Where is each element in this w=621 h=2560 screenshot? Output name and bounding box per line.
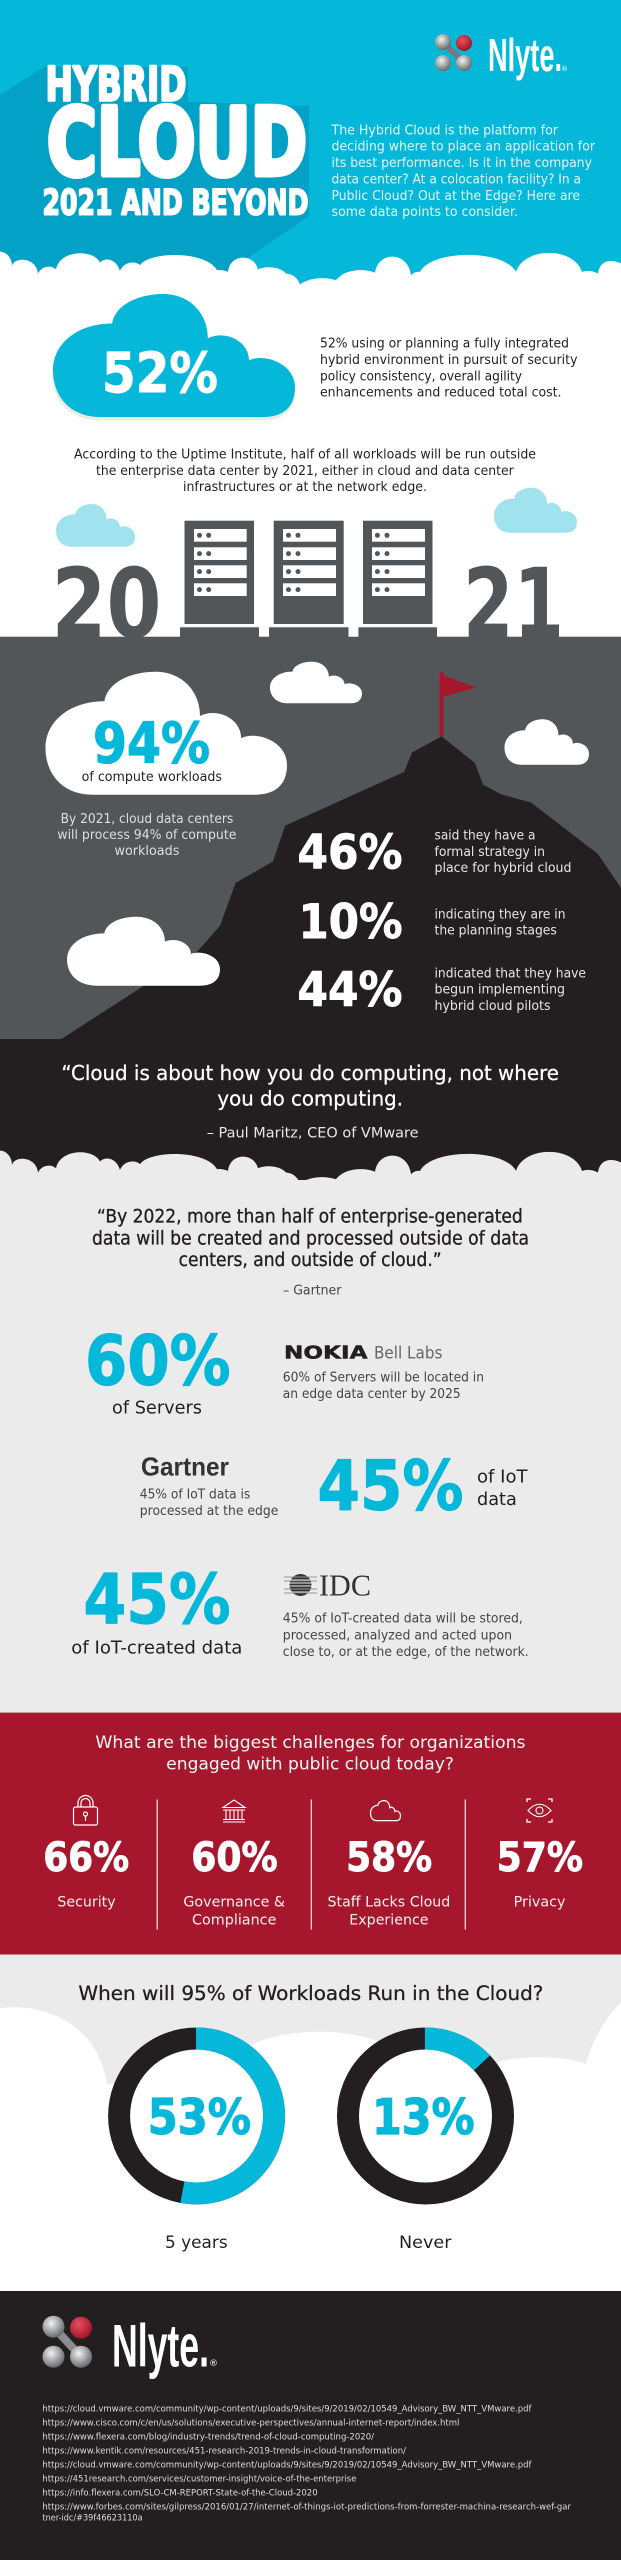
stat: 94%: 94% (93, 711, 210, 776)
cloud edge (0, 1151, 621, 1189)
intro text: some data points to consider. (332, 204, 518, 220)
icon: flag (440, 672, 476, 736)
year digits: 20: 20 (52, 548, 162, 660)
quote: Paul Maritz: “Cloud is about how you do computing, not where (61, 1061, 559, 1085)
logo: IDC: IDC (319, 1568, 371, 1603)
labels: challenge names: Staff Lacks Cloud (328, 1895, 450, 1911)
text: 52% description: policy consistency, overall agility (320, 368, 522, 384)
text: Gartner description: processed at the edge (140, 1503, 278, 1519)
panel: 94 percent (46, 672, 287, 859)
quote: Gartner: data will be created and processed outside of data (92, 1228, 529, 1249)
quote: Gartner: centers, and outside of cloud.” (179, 1250, 442, 1271)
stat: 45% of IoT-created data: 45% (84, 1560, 230, 1640)
text: Uptime Institute: the enterprise data center by 2021, either in cloud and data center (96, 463, 514, 479)
text: Nokia description: an edge data center by 2025 (283, 1386, 461, 1402)
text: 52% description (320, 336, 578, 401)
label: of compute workloads: of compute workloads (82, 769, 222, 785)
logo: Nokia Bell Labs: NOKIA (284, 1342, 368, 1363)
donut: 53% (119, 2038, 274, 2194)
cloud shadow (52, 297, 295, 420)
stat: 45% of IoT-created data: of IoT-created data (71, 1637, 242, 1658)
text: sources: https://info.flexera.com/SLO-CM-REPORT-State-of-the-Cloud-2020 (42, 2489, 318, 2499)
text: 46% description: place for hybrid cloud (434, 860, 572, 876)
text: Gartner description (140, 1486, 278, 1519)
labels: challenge names: Governance & (183, 1895, 285, 1911)
stat: 60% of Servers: of Servers (112, 1397, 202, 1418)
text: 52% description: 52% using or planning a fully integrated (320, 336, 569, 352)
icon: lock (74, 1796, 98, 1825)
stat: 60% of Servers: 60% (85, 1322, 231, 1402)
stat group: hybrid cloud strategy (298, 826, 586, 1018)
intro text: The Hybrid Cloud is the platform for (331, 122, 558, 138)
title long shadow (0, 67, 309, 285)
background cloud (0, 2002, 621, 2295)
text: 46% description: said they have a (434, 827, 536, 843)
text: IDC description: processed, analyzed and acted upon (283, 1627, 512, 1643)
label: 5 years: 5 years (165, 2233, 228, 2252)
text: 44% description (434, 966, 586, 1014)
labels: challenge names: Privacy (514, 1895, 566, 1911)
text: 10% description: the planning stages (434, 923, 557, 939)
text: sources: https://www.flexera.com/blog/industry-trends/trend-of-cloud-computing-2020/ (42, 2433, 374, 2443)
label: Never: Never (399, 2233, 452, 2252)
text: Uptime Institute (74, 446, 536, 495)
text: sources: https://www.kentik.com/resources/451-research-2019-trends-in-cloud-transformation/ (42, 2447, 406, 2457)
text: 44% description: indicated that they have (434, 966, 586, 982)
text: Nokia description (283, 1370, 484, 1402)
stat: 52%: 52% (102, 341, 218, 405)
text: 52% description: hybrid environment in pursuit of security (320, 352, 578, 368)
title: CLOUD (47, 88, 307, 196)
labels: challenge names (57, 1895, 566, 1929)
logo: Nokia Bell Labs: Bell Labs (374, 1343, 443, 1363)
stats: challenge percentages: 60% (191, 1835, 278, 1881)
text: 10% description (434, 907, 566, 939)
panel: workloads in the cloud (0, 1954, 621, 2295)
stat: 46%: 46% (298, 826, 402, 881)
donut: 13%: 13% (372, 2089, 474, 2146)
text: 94% description (57, 811, 236, 859)
title (42, 58, 308, 224)
text: 46% description (434, 827, 572, 876)
quote: Paul Maritz: you do computing. (217, 1086, 403, 1110)
logo: Nlyte footer (42, 2313, 218, 2380)
text: sources: https://www.forbes.com/sites/gilpress/2016/01/27/internet-of-things-iot-predictions-from-forrester-machina-research-wef-gar (42, 2503, 571, 2513)
text: sources: https://cloud.vmware.com/community/wp-content/uploads/9/sites/9/2019/02/10549_Advisory_BW_NTT_VMware.pdf (42, 2405, 532, 2415)
year digits: 21: 21 (463, 548, 564, 660)
text: 44% description: hybrid cloud pilots (434, 998, 550, 1014)
heading: when: When will 95% of Workloads Run in the Cloud? (78, 1982, 543, 2005)
logo: Gartner: Gartner (141, 1452, 229, 1482)
text: 94% description: By 2021, cloud data centers (61, 811, 233, 827)
logo: Nlyte top: ® (561, 65, 568, 73)
stats: challenge percentages: 57% (497, 1835, 583, 1881)
panel: footer (0, 2291, 621, 2560)
stats: challenge percentages: 58% (346, 1835, 432, 1881)
stat: 45% of IoT data: of IoT (477, 1466, 529, 1487)
icon: server racks (180, 521, 437, 637)
intro text: data center? At a colocation facility? In a (332, 171, 581, 187)
text: 94% description: will process 94% of compute (57, 827, 236, 843)
title: 2021 AND BEYOND (42, 184, 308, 224)
quote: Paul Maritz: – Paul Maritz, CEO of VMware (207, 1126, 419, 1142)
text: Uptime Institute: According to the Uptime Institute, half of all workloads will be run outside (74, 446, 536, 462)
text: IDC description: 45% of IoT-created data will be stored, (283, 1611, 523, 1627)
intro text: its best performance. Is it in the company (332, 155, 592, 171)
text: 94% description: workloads (114, 843, 179, 859)
donut: 13% (348, 2038, 503, 2194)
icon: white cloud right (504, 719, 589, 765)
cloud: 94% (46, 672, 287, 795)
panel: challenges (0, 1713, 621, 1954)
icon: light cloud right (494, 488, 577, 533)
heading: challenges: engaged with public cloud today? (166, 1755, 454, 1775)
icon: cloud outline (370, 1801, 400, 1821)
intro text (331, 122, 595, 220)
icon: white cloud top (270, 662, 362, 703)
logo: Nokia Bell Labs (284, 1342, 443, 1363)
stats: challenge percentages: 66% (43, 1835, 129, 1881)
panel: edge data (0, 1151, 621, 1720)
intro text: deciding where to place an application for (332, 139, 595, 155)
text: Nokia description: 60% of Servers will be located in (283, 1370, 484, 1386)
text: 46% description: formal strategy in (434, 844, 545, 860)
text: 52% description: enhancements and reduced total cost. (320, 385, 562, 401)
quote: Gartner (92, 1206, 529, 1271)
heading: challenges (95, 1733, 526, 1775)
quote: Gartner: “By 2022, more than half of enterprise-generated (97, 1206, 523, 1227)
attribution: Gartner: – Gartner (283, 1282, 342, 1298)
text: Gartner description: 45% of IoT data is (140, 1486, 250, 1502)
stat: 44%: 44% (298, 963, 402, 1018)
quote: Paul Maritz (61, 1061, 559, 1142)
text: 10% description: indicating they are in (434, 907, 566, 923)
logo: IDC (284, 1568, 371, 1603)
labels: challenge names: Security (57, 1895, 116, 1911)
panel: gray band (0, 637, 621, 1040)
text: sources: https://cloud.vmware.com/community/wp-content/uploads/9/sites/9/2019/02/10549_Advisory_BW_NTT_VMware.pdf (42, 2461, 532, 2471)
icon: light cloud left (56, 504, 135, 547)
logo: Nlyte top: Nlyte. (488, 29, 562, 81)
text: IDC description: close to, or at the edge, of the network. (283, 1644, 529, 1660)
text: sources (42, 2405, 571, 2523)
logo: Nlyte footer: Nlyte. (112, 2313, 209, 2380)
illustration: mountain (0, 736, 621, 1200)
stat: 10%: 10% (298, 895, 402, 950)
labels: challenge names: Experience (349, 1913, 428, 1929)
cloud: 52% (53, 294, 295, 417)
stats: challenge percentages (43, 1835, 583, 1881)
title: HYBRID (46, 58, 186, 112)
stat: 45% of IoT data: 45% (318, 1446, 464, 1526)
intro text: Public Cloud? Out at the Edge? Here are (332, 188, 580, 204)
text: sources: https://www.cisco.com/c/en/us/solutions/executive-perspectives/annual-internet-report/index.html (42, 2419, 459, 2429)
heading: challenges: What are the biggest challenges for organizations (95, 1733, 526, 1753)
stat: 45% of IoT data: data (477, 1489, 517, 1510)
logo: Nlyte footer: ® (209, 2359, 218, 2369)
text: sources: tner-idc/#39f46623110a (42, 2513, 143, 2523)
donut: 53%: 53% (148, 2089, 251, 2146)
text: sources: https://451research.com/services/customer-insight/voice-of-the-enterprise (42, 2475, 356, 2485)
text: 44% description: begun implementing (434, 982, 565, 998)
labels: challenge names: Compliance (192, 1913, 276, 1929)
logo: Nlyte top (435, 29, 568, 81)
icon: institution (223, 1800, 245, 1822)
text: Uptime Institute: infrastructures or at the network edge. (183, 479, 427, 495)
panel: header (0, 0, 621, 290)
icon: eye (527, 1799, 552, 1822)
panel: 52 percent (52, 294, 578, 420)
icon: white cloud lower left (67, 917, 220, 986)
text: IDC description (283, 1611, 529, 1660)
cloud edge (0, 252, 621, 290)
